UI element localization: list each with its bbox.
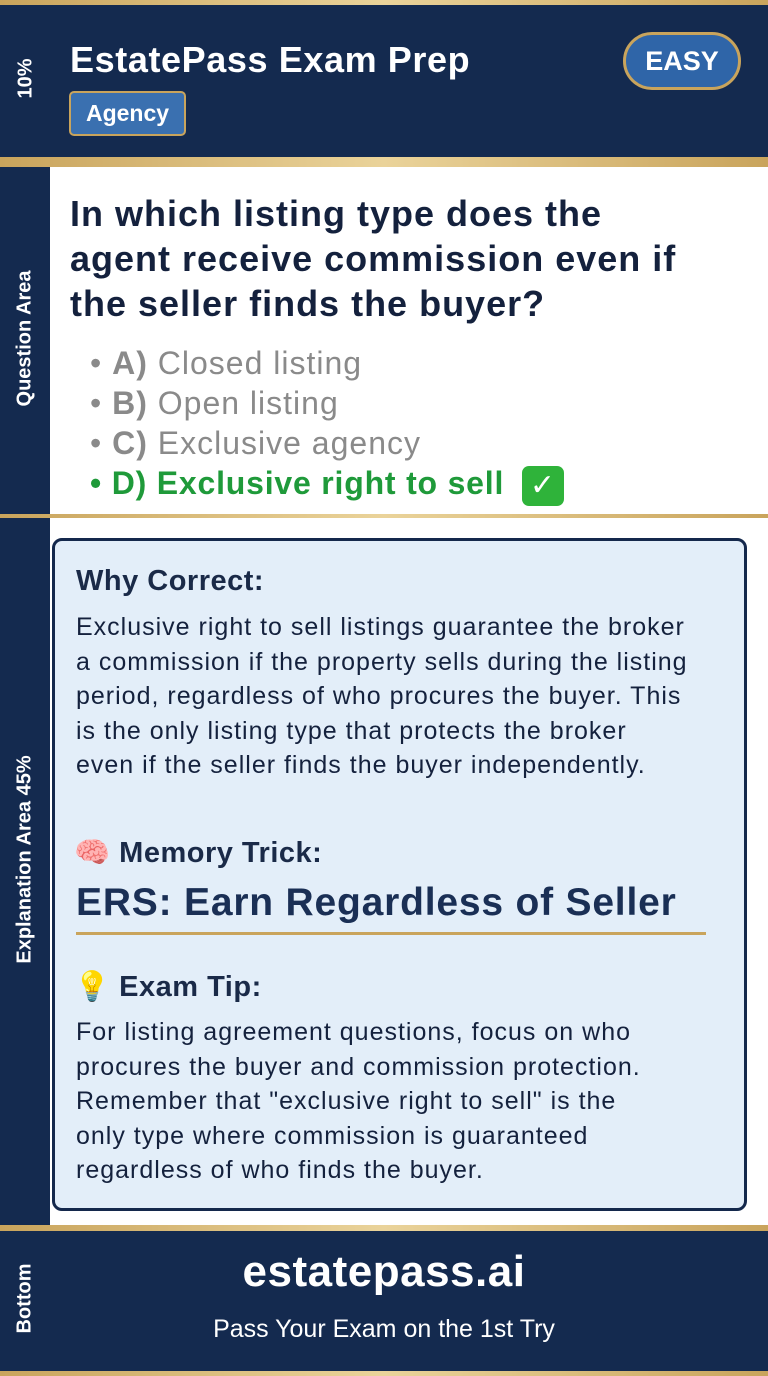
gold divider: [0, 157, 768, 167]
left strip: Explanation Area: Explanation Area 45%: [14, 755, 36, 964]
exam tip text: Remember that "exclusive right to sell" is the: [76, 1087, 616, 1115]
question text: In which listing type does the: [70, 193, 602, 234]
tagline: Pass Your Exam on the 1st Try: [213, 1315, 555, 1343]
why correct text: even if the seller finds the buyer independently.: [76, 751, 646, 779]
heading: Memory Trick: 🧠 Memory Trick:: [74, 837, 322, 869]
question text: the seller finds the buyer?: [70, 283, 545, 324]
options list: ✓: [530, 469, 556, 502]
label: Bottom: Bottom: [14, 1264, 36, 1334]
why correct text: period, regardless of who procures the buyer. This: [76, 682, 681, 710]
options list: • A) Closed listing: [90, 345, 362, 381]
question area panel: [0, 167, 676, 514]
why correct text: is the only listing type that protects the broker: [76, 716, 627, 744]
options list: • D) Exclusive right to sell: [90, 465, 504, 501]
brand: estatepass.ai: [243, 1247, 525, 1296]
question text: agent receive commission even if: [70, 238, 676, 279]
heading: Why Correct: Why Correct:: [76, 565, 264, 597]
mnemonic: ERS: Earn Regardless of Seller: [76, 881, 677, 924]
options list: • B) Open listing: [90, 385, 339, 421]
gold underline: [76, 932, 706, 935]
exam tip text: [76, 1018, 641, 1184]
question text: [70, 193, 676, 324]
heading: Exam Tip: 💡 Exam Tip:: [74, 971, 262, 1003]
gold divider: [0, 1225, 768, 1231]
explanation area panel: [0, 518, 747, 1225]
why correct text: [76, 613, 688, 779]
gold divider: [0, 514, 768, 518]
why correct text: Exclusive right to sell listings guarantee the broker: [76, 613, 685, 641]
exam tip text: For listing agreement questions, focus on who: [76, 1018, 631, 1046]
explanation card: [52, 538, 747, 1211]
label: 10%: 10%: [14, 58, 36, 99]
exam tip text: regardless of who finds the buyer.: [76, 1156, 484, 1184]
why correct text: a commission if the property sells during the listing: [76, 648, 688, 676]
exam tip text: only type where commission is guaranteed: [76, 1122, 588, 1150]
options list: • C) Exclusive agency: [90, 425, 421, 461]
header panel: [0, 5, 768, 157]
exam tip text: procures the buyer and commission protection.: [76, 1052, 641, 1080]
top gold border: [0, 0, 768, 5]
badge: EASY: [623, 32, 741, 90]
left strip: Question Area: [0, 167, 50, 515]
footer panel: [0, 1231, 768, 1371]
tag: Agency: Agency: [86, 100, 169, 126]
badge: EASY: EASY: [645, 46, 719, 76]
options list: [90, 345, 564, 506]
title: EstatePass Exam Prep: [70, 39, 470, 80]
left strip: Explanation Area: [0, 518, 50, 1226]
tag: Agency: [69, 91, 186, 136]
left strip: Question Area: Question Area: [14, 271, 36, 406]
bottom gold border: [0, 1371, 768, 1376]
